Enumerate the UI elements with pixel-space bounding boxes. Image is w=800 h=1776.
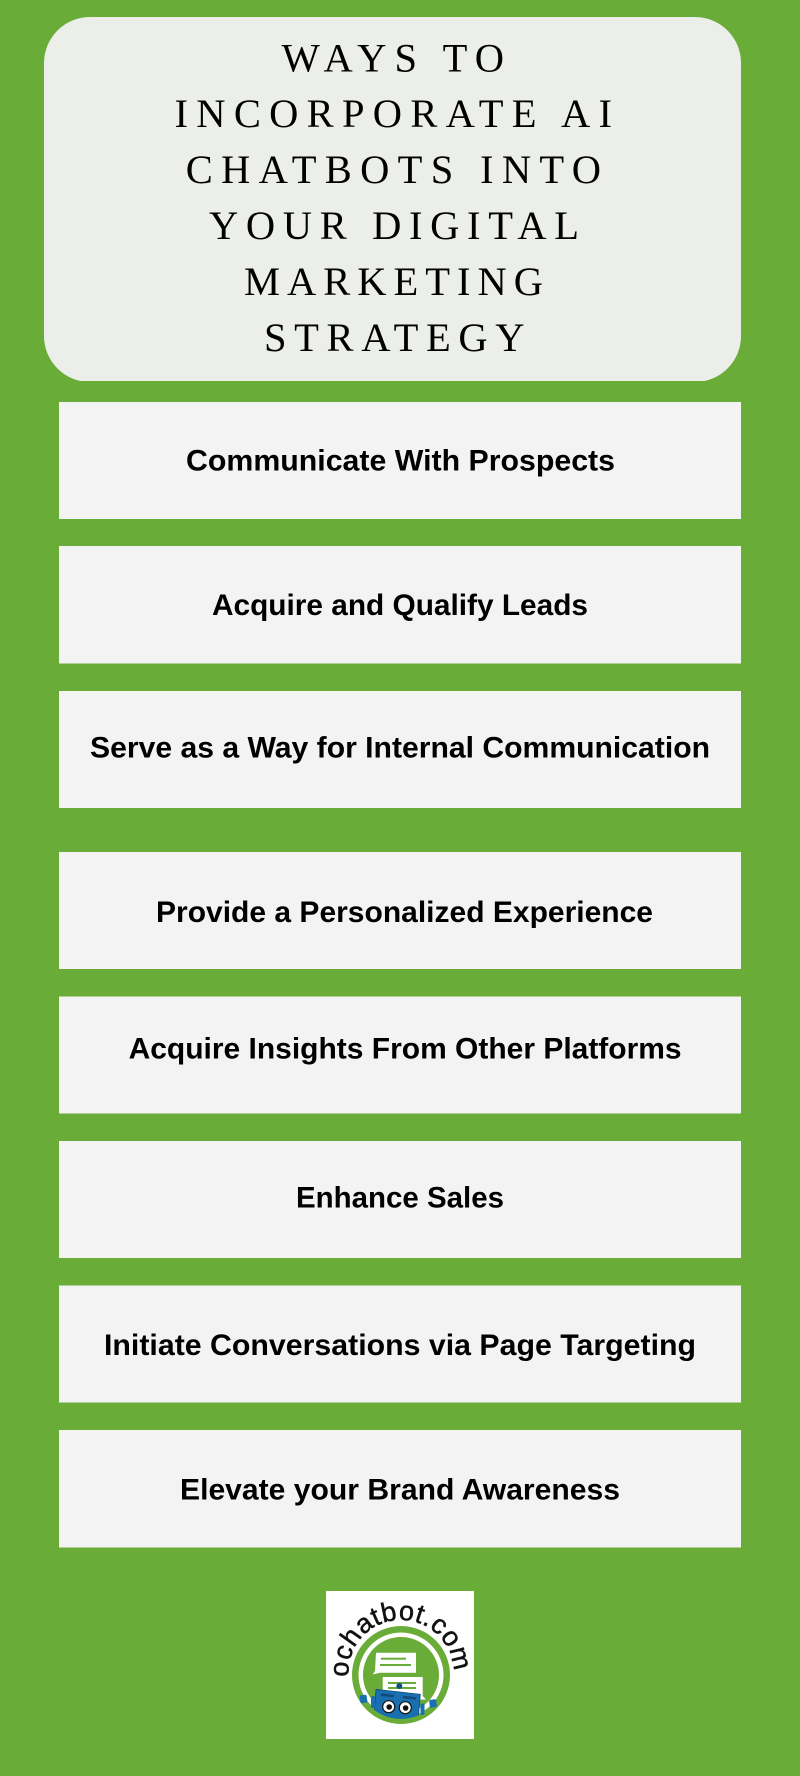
logo wordmark: ochatbot.com xyxy=(334,1602,468,1676)
logo robot xyxy=(359,1683,437,1722)
panel: item 2 xyxy=(59,546,741,664)
panel: item 6 xyxy=(59,1141,741,1258)
title: MARKETING xyxy=(244,259,543,304)
panel: item 8: Elevate your Brand Awareness xyxy=(180,1473,620,1506)
panel: item 1: Communicate With Prospects xyxy=(186,445,615,478)
panel: item 4 xyxy=(59,852,741,969)
panel: item 3 xyxy=(59,691,741,808)
panel: item 7 xyxy=(59,1286,741,1402)
title: CHATBOTS INTO xyxy=(186,147,601,192)
logo ring xyxy=(352,1626,450,1724)
panel: item 4: Provide a Personalized Experience xyxy=(156,896,653,929)
panel: item 7: Initiate Conversations via Page Targeting xyxy=(104,1329,696,1362)
title xyxy=(174,35,612,360)
panel: item 1 xyxy=(59,402,741,519)
title: YOUR DIGITAL xyxy=(209,203,579,248)
panel: item 2: Acquire and Qualify Leads xyxy=(212,589,588,622)
logo chat bubbles xyxy=(373,1653,426,1700)
panel: item 3: Serve as a Way for Internal Communication xyxy=(90,732,710,765)
panel: item 8 xyxy=(59,1430,741,1548)
panel: item 5 xyxy=(59,996,741,1114)
panel: item 5: Acquire Insights From Other Platforms xyxy=(129,1033,682,1066)
panel: item 6: Enhance Sales xyxy=(296,1182,504,1215)
title: INCORPORATE AI xyxy=(174,91,612,136)
icon: ochatbot.com logo xyxy=(326,1591,474,1739)
panel: title header xyxy=(44,17,741,382)
title: WAYS TO xyxy=(282,35,504,80)
title: STRATEGY xyxy=(264,315,524,360)
